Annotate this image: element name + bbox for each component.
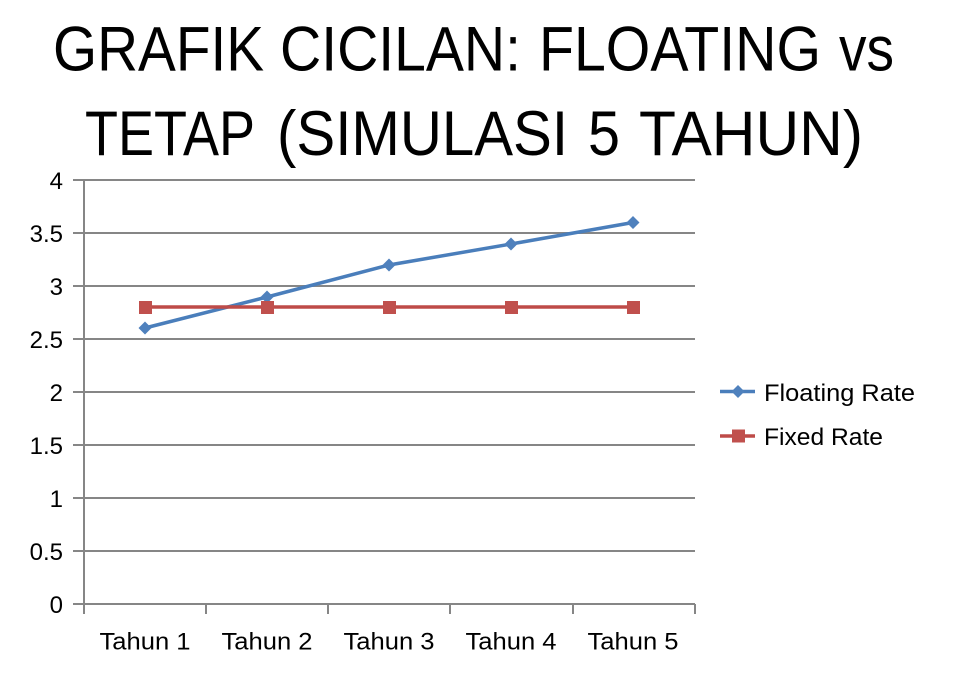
y axis labels: 2 [50, 380, 63, 407]
x axis labels: Tahun 1 [100, 628, 190, 656]
x axis labels: Tahun 5 [588, 628, 678, 656]
line: fixed rate [139, 301, 640, 314]
title: FLOATING [539, 14, 821, 84]
y axis labels [30, 168, 63, 619]
y axis labels: 0 [50, 592, 63, 619]
title: TETAP [85, 99, 255, 169]
line: floating rate [138, 216, 640, 334]
title: vs [839, 14, 894, 84]
legend [720, 380, 915, 451]
title: TAHUN) [639, 99, 863, 169]
x axis labels: Tahun 3 [344, 628, 434, 656]
title: (SIMULASI [277, 99, 568, 169]
y axis labels: 1.5 [30, 433, 63, 460]
y axis labels: 3.5 [30, 221, 63, 248]
legend: floating rate: Floating Rate [764, 380, 915, 407]
y axis labels: 1 [50, 486, 63, 513]
x axis labels [100, 628, 678, 656]
y axis labels: 4 [50, 168, 63, 195]
x axis labels: Tahun 2 [222, 628, 312, 656]
legend: fixed rate: Fixed Rate [764, 424, 883, 451]
title [53, 14, 894, 169]
x axis labels: Tahun 4 [466, 628, 556, 656]
title: CICILAN: [280, 14, 521, 84]
y axis labels: 0.5 [30, 539, 63, 566]
title: GRAFIK [53, 14, 264, 84]
title: 5 [588, 99, 620, 169]
y axis labels: 2.5 [30, 327, 63, 354]
y axis labels: 3 [50, 274, 63, 301]
